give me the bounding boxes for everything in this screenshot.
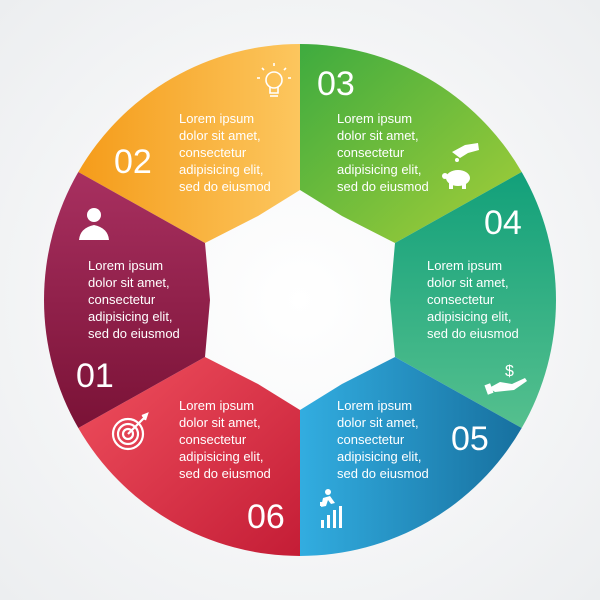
text: segment 02: Lorem ipsum bbox=[179, 111, 254, 126]
text: segment 01: sed do eiusmod bbox=[88, 326, 180, 341]
text: segment 02: dolor sit amet, bbox=[179, 128, 261, 143]
text: segment 02: adipisicing elit, bbox=[179, 162, 264, 177]
icon: hand with dollar: $ bbox=[505, 363, 514, 380]
text: segment 04: adipisicing elit, bbox=[427, 309, 512, 324]
text: segment 05: sed do eiusmod bbox=[337, 466, 429, 481]
text: segment 03: dolor sit amet, bbox=[337, 128, 419, 143]
icon: businessman bbox=[79, 208, 109, 240]
number 06: 06 bbox=[247, 498, 285, 536]
number 02: 02 bbox=[114, 143, 152, 181]
text: segment 05 bbox=[337, 398, 429, 481]
text: segment 05: dolor sit amet, bbox=[337, 415, 419, 430]
text: segment 04: sed do eiusmod bbox=[427, 326, 519, 341]
text: segment 01: adipisicing elit, bbox=[88, 309, 173, 324]
icon: light bulb bbox=[257, 63, 291, 96]
text: segment 04 bbox=[427, 258, 519, 341]
text: segment 03: adipisicing elit, bbox=[337, 162, 422, 177]
segment 02 (orange) bbox=[78, 44, 300, 243]
text: segment 01: consectetur bbox=[88, 292, 156, 307]
segment 04 (teal) bbox=[390, 172, 556, 428]
text: segment 01: Lorem ipsum bbox=[88, 258, 163, 273]
text: segment 03: Lorem ipsum bbox=[337, 111, 412, 126]
text: segment 06 bbox=[179, 398, 271, 481]
segment 06 (red) bbox=[78, 357, 300, 556]
text: segment 05: adipisicing elit, bbox=[337, 449, 422, 464]
icon: runner with chart bbox=[320, 489, 342, 528]
text: segment 02 bbox=[179, 111, 271, 194]
segment 01 (maroon) bbox=[44, 172, 210, 428]
text: segment 01 bbox=[88, 258, 180, 341]
number 05: 05 bbox=[451, 420, 489, 458]
text: segment 04: consectetur bbox=[427, 292, 495, 307]
number 04: 04 bbox=[484, 204, 522, 242]
text: segment 02: consectetur bbox=[179, 145, 247, 160]
icon: target bbox=[113, 414, 147, 449]
segment 03 (green) bbox=[300, 44, 522, 243]
text: segment 03: sed do eiusmod bbox=[337, 179, 429, 194]
number 01: 01 bbox=[76, 357, 114, 395]
text: segment 06: dolor sit amet, bbox=[179, 415, 261, 430]
text: segment 05: Lorem ipsum bbox=[337, 398, 412, 413]
segment 05 (blue) bbox=[300, 357, 522, 556]
text: segment 02: sed do eiusmod bbox=[179, 179, 271, 194]
text: segment 03: consectetur bbox=[337, 145, 405, 160]
icon: hand with dollar bbox=[484, 363, 527, 395]
text: segment 06: Lorem ipsum bbox=[179, 398, 254, 413]
icon: hand and piggy bank bbox=[442, 143, 479, 189]
text: segment 04: Lorem ipsum bbox=[427, 258, 502, 273]
text: segment 05: consectetur bbox=[337, 432, 405, 447]
text: segment 01: dolor sit amet, bbox=[88, 275, 170, 290]
text: segment 06: consectetur bbox=[179, 432, 247, 447]
text: segment 06: adipisicing elit, bbox=[179, 449, 264, 464]
text: segment 03 bbox=[337, 111, 429, 194]
text: segment 06: sed do eiusmod bbox=[179, 466, 271, 481]
text: segment 04: dolor sit amet, bbox=[427, 275, 509, 290]
number 03: 03 bbox=[317, 65, 355, 103]
